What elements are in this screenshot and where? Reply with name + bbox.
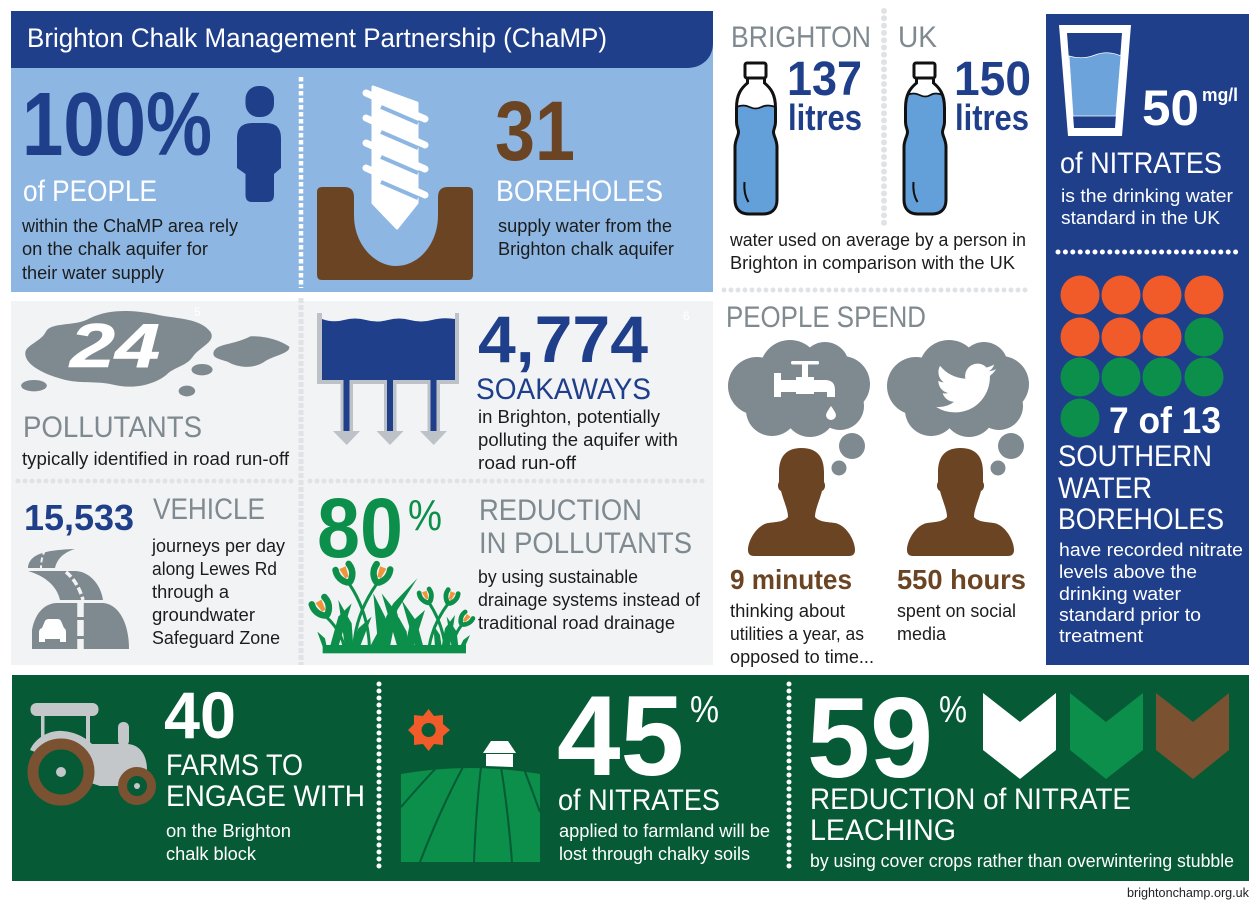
stat: 15,533 vehicle journeys: through a	[152, 582, 230, 602]
stat: 40 farms	[164, 678, 365, 864]
text: southern water boreholes: BOREHOLES	[1058, 503, 1224, 536]
icon: UK bottle	[904, 63, 946, 214]
panel: ChaMP key facts	[11, 11, 713, 292]
stat: pollutants: POLLUTANTS	[23, 411, 202, 444]
stat: 59% reduction: by using cover crops rather than overwintering stubble	[810, 851, 1234, 871]
heading: Brighton: BRIGHTON	[731, 21, 871, 54]
stat: 150 litres: litres	[955, 97, 1029, 138]
caption: water use: water used on average by a person in	[729, 230, 1026, 250]
stat: 80% reduction: by using sustainable	[478, 567, 638, 587]
stat: 4,774 soakaways: polluting the aquifer with	[478, 430, 678, 450]
icon: grass and flowers	[311, 564, 473, 653]
stat: 50 mg/l	[1142, 80, 1238, 136]
icon: soakaway tank	[317, 313, 459, 445]
text: of nitrates: standard in the UK	[1061, 208, 1220, 228]
stat: 100% of people: within the ChaMP area rely	[21, 216, 238, 236]
stat: 80% reduction: drainage systems instead of	[478, 590, 701, 610]
panel: pollution facts: 6	[683, 309, 690, 323]
stat: 31 boreholes: 31	[495, 84, 575, 178]
heading: people spend: PEOPLE SPEND	[726, 301, 926, 334]
stat: pollutants	[22, 411, 290, 469]
stat: 4,774 soakaways	[476, 302, 678, 473]
stat: 40 farms: on the Brighton	[166, 821, 291, 841]
stat: 15,533 vehicle journeys: journeys per day	[151, 536, 285, 556]
stat: 59% reduction	[807, 675, 1234, 871]
title banner	[11, 11, 713, 68]
stat: 80% reduction	[317, 481, 701, 633]
panel: pollution facts: 5	[194, 305, 201, 319]
icon: three chevrons	[983, 693, 1229, 779]
stat: 31 boreholes	[495, 84, 674, 259]
stat: 31 boreholes: Brighton chalk aquifer	[498, 239, 674, 259]
icon: tractor	[30, 703, 152, 800]
icon: thought cloud with tap	[728, 340, 870, 476]
stat: 100% of people: on the chalk aquifer for	[22, 239, 208, 259]
stat: 15,533 vehicle journeys: VEHICLE	[153, 493, 265, 526]
panel: farming	[12, 673, 1249, 881]
stat: 100% of people: 100%	[22, 75, 212, 175]
stat: 59% reduction: %	[939, 689, 967, 731]
text: of nitrates	[1060, 147, 1233, 228]
stat: 137 litres: litres	[788, 97, 862, 138]
stat: 80% reduction: traditional road drainage	[478, 613, 675, 633]
stat: 40 farms: ENGAGE WITH	[166, 780, 365, 813]
stat: 45% of nitrates: of NITRATES	[558, 784, 720, 817]
stat: 550 hours	[897, 564, 1026, 644]
icon: borehole drill	[317, 87, 473, 280]
stat: 15,533 vehicle journeys: groundwater	[152, 605, 255, 625]
stat: 80% reduction: IN POLLUTANTS	[479, 527, 692, 560]
icon: thought cloud with twitter bird	[887, 340, 1029, 476]
text: southern water boreholes: treatment	[1059, 626, 1143, 646]
stat: 9 minutes: opposed to time...	[730, 647, 874, 667]
stat: 150 litres: 150	[954, 53, 1031, 106]
stat: 100% of people	[21, 75, 238, 283]
title banner: Brighton Chalk Management Partnership (ChaMP)	[27, 23, 607, 53]
stat: 9 minutes: 9 minutes	[730, 564, 852, 595]
footer url: brightonchamp.org.uk	[1127, 885, 1249, 900]
stat: 59% reduction: LEACHING	[810, 814, 956, 847]
stat: 4,774 soakaways: road run-off	[478, 453, 577, 473]
stat: 4,774 soakaways: SOAKAWAYS	[476, 373, 651, 406]
stat: 40 farms: FARMS TO	[166, 749, 303, 782]
text: southern water boreholes	[1058, 440, 1243, 646]
panel: nitrates	[1046, 14, 1249, 665]
stat: 15,533 vehicle journeys: along Lewes Rd	[152, 559, 277, 579]
panel: people spend	[726, 301, 1029, 667]
stat: 31 boreholes: supply water from the	[498, 216, 672, 236]
stat: 80% reduction: REDUCTION	[479, 494, 642, 527]
stat: 150 litres	[954, 53, 1031, 138]
icon: puddle with 24	[21, 311, 289, 396]
stat: 45% of nitrates: lost through chalky soils	[559, 844, 750, 864]
text: of nitrates: is the drinking water	[1061, 186, 1233, 206]
stat: 137 litres	[787, 53, 862, 138]
stat: 4,774 soakaways: 4,774	[478, 302, 648, 376]
stat: 9 minutes: thinking about	[730, 601, 845, 621]
icon: glass of water	[1059, 25, 1131, 136]
icon: tulip flowers	[311, 564, 473, 628]
stat: 550 hours: media	[897, 624, 947, 644]
caption: water use	[729, 230, 1026, 273]
stat: 50 mg/l: 50	[1142, 80, 1199, 136]
icon: farm field and barn	[401, 741, 540, 862]
stat: 45% of nitrates	[557, 673, 770, 864]
stat: 80% reduction: %	[408, 491, 442, 540]
dot chart: 7 of 13 boreholes	[1060, 276, 1224, 438]
caption: water use: Brighton in comparison with the UK	[730, 253, 1015, 273]
stat: 100% of people: their water supply	[22, 263, 164, 283]
stat: 137 litres: 137	[787, 53, 862, 106]
icon: puddle with 24: 24	[69, 312, 160, 381]
text: southern water boreholes: levels above the	[1059, 562, 1197, 582]
text: southern water boreholes: have recorded nitrate	[1059, 540, 1243, 560]
heading: UK: UK	[898, 21, 937, 54]
stat: 4,774 soakaways: in Brighton, potentially	[478, 407, 660, 427]
stat: 550 hours: 550 hours	[897, 564, 1026, 595]
icon: head silhouette right	[907, 448, 1014, 556]
stat: 100% of people: of PEOPLE	[23, 175, 157, 208]
stat: 40 farms: 40	[164, 678, 236, 752]
panel: water use comparison	[729, 11, 1031, 273]
stat: 9 minutes	[730, 564, 874, 667]
stat: 15,533 vehicle journeys: Safeguard Zone	[152, 628, 280, 648]
stat: 59% reduction: REDUCTION of NITRATE	[810, 783, 1131, 816]
text: southern water boreholes: WATER	[1058, 472, 1152, 505]
stat: 50 mg/l: mg/l	[1202, 85, 1238, 105]
stat: 9 minutes: utilities a year, as	[730, 624, 864, 644]
text: southern water boreholes: drinking water	[1059, 584, 1181, 604]
icon: head silhouette left	[748, 448, 855, 556]
text: southern water boreholes: SOUTHERN	[1058, 440, 1212, 473]
stat: 80% reduction: 80	[317, 481, 403, 575]
stat: pollutants: typically identified in road run-off	[22, 449, 290, 469]
stat: 45% of nitrates: 45	[557, 673, 684, 800]
stat: 45% of nitrates: applied to farmland will be	[559, 821, 770, 841]
stat: 59% reduction: 59	[807, 675, 933, 802]
stat: 40 farms: chalk block	[166, 844, 257, 864]
stat: 15,533 vehicle journeys: 15,533	[24, 497, 134, 538]
stat: 15,533 vehicle journeys	[24, 493, 285, 648]
text: southern water boreholes: standard prior to	[1059, 605, 1201, 625]
text: of nitrates: of NITRATES	[1060, 147, 1222, 180]
icon: sun	[408, 709, 450, 751]
panel: pollution facts	[11, 298, 713, 665]
icon: Brighton bottle	[735, 63, 777, 214]
stat: 550 hours: spent on social	[897, 601, 1016, 621]
stat: 7 of 13: 7 of 13	[1109, 400, 1221, 441]
stat: 31 boreholes: BOREHOLES	[496, 175, 663, 208]
stat: 45% of nitrates: %	[690, 689, 719, 731]
icon: winding road	[28, 549, 129, 650]
icon: person	[237, 86, 281, 202]
